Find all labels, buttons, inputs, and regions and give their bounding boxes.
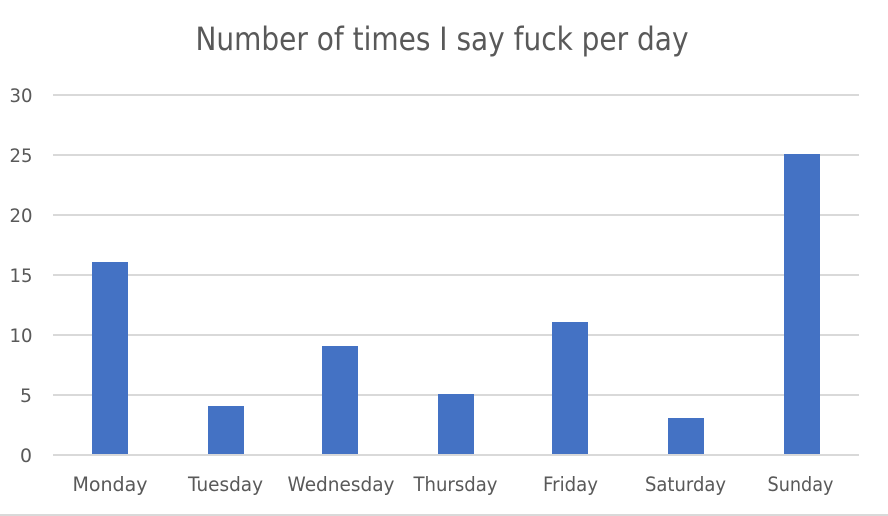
y axis labels: 10 — [10, 325, 32, 347]
y axis labels: 25 — [10, 145, 32, 167]
y axis labels: 30 — [10, 85, 32, 107]
x axis labels: Wednesday — [288, 473, 394, 496]
y axis labels — [10, 85, 32, 467]
x axis labels: Thursday — [413, 473, 498, 496]
x axis labels: Tuesday — [187, 473, 263, 496]
y axis labels: 15 — [10, 265, 32, 287]
x axis labels: Saturday — [645, 473, 726, 496]
x axis labels: Sunday — [768, 473, 834, 496]
y axis labels: 0 — [20, 445, 32, 467]
x axis labels: Monday — [72, 473, 148, 496]
title: Number of times I say fuck per day — [196, 20, 688, 58]
x axis labels — [72, 473, 834, 496]
gridlines — [53, 95, 859, 455]
x axis labels: Friday — [543, 473, 598, 496]
y axis labels: 5 — [20, 385, 32, 407]
y axis labels: 20 — [10, 205, 32, 227]
bottom border — [0, 514, 888, 516]
bars — [92, 154, 820, 454]
